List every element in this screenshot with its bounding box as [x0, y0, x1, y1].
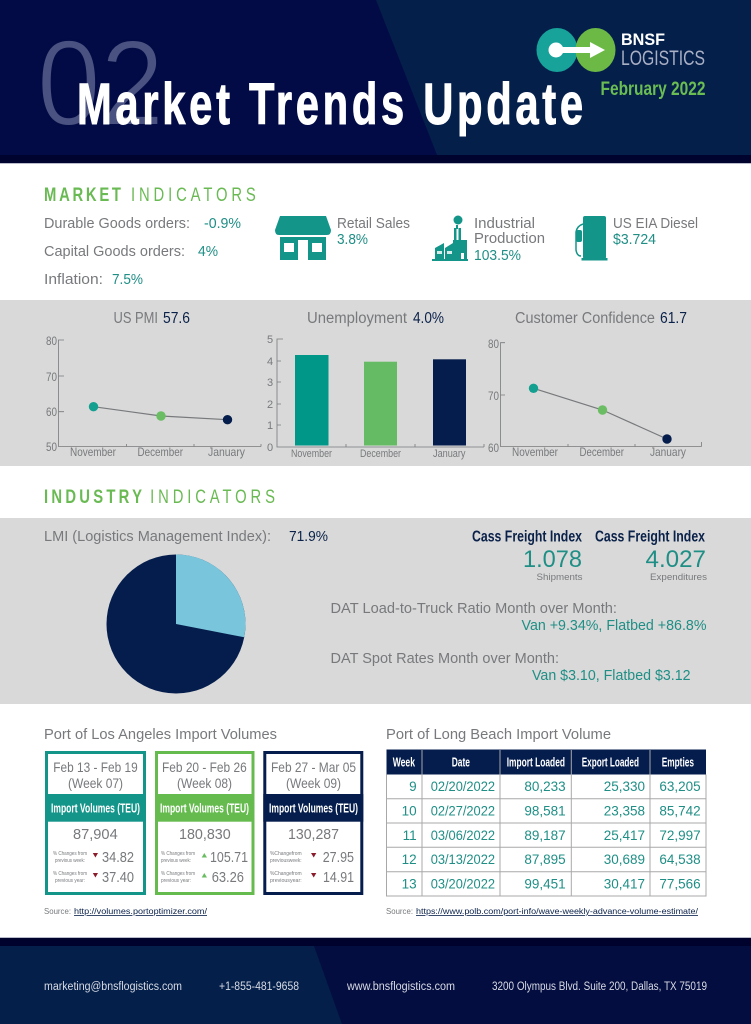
- industry indicators heading: INDUSTRY: [44, 486, 143, 507]
- table: Long Beach import volume: 13: [402, 877, 417, 892]
- card: week 09: previousweek:: [270, 858, 302, 864]
- retail sales: [337, 216, 410, 248]
- card: week 09: 130,287: [288, 826, 339, 843]
- market indicators list: 7.5%: [112, 271, 143, 288]
- footer banner: [0, 937, 751, 1024]
- retail sales: 3.8%: [337, 232, 368, 248]
- card: week 09: %Changefrom: [270, 851, 302, 857]
- card: week 08: Import Volumes (TEU): [160, 802, 249, 816]
- cass freight index: expenditures: Cass Freight Index: [595, 528, 705, 546]
- table: Long Beach import volume: 12: [402, 852, 417, 867]
- market indicators list: 4%: [198, 243, 218, 260]
- table: Long Beach import volume: 03/20/2022: [431, 877, 495, 892]
- line chart: US PMI: 70: [46, 370, 57, 384]
- DAT load to truck: Van +9.34%, Flatbed +86.8%: [522, 618, 707, 634]
- market indicators heading: INDICATORS: [131, 184, 256, 205]
- card: week 08: previous week:: [161, 858, 191, 864]
- line chart: US PMI: US PMI: [114, 310, 158, 327]
- card: week 07: [46, 752, 145, 894]
- bar chart: unemployment: December: [360, 448, 401, 460]
- cass freight index: expenditures: 4.027: [646, 546, 706, 573]
- card: week 08: (Week 08): [177, 775, 232, 791]
- title: Market Trends Update: [77, 71, 583, 137]
- market indicators heading: [44, 184, 256, 205]
- cass freight index: shipments: Cass Freight Index: [472, 528, 582, 546]
- line chart: US PMI: 50: [46, 440, 57, 454]
- line chart: US PMI: November: [70, 445, 116, 459]
- icon: fuel pump: [576, 216, 608, 260]
- table: Long Beach import volume: 99,451: [524, 877, 566, 892]
- card: week 07: 34.82: [102, 850, 134, 866]
- DAT spot rates: [330, 651, 690, 684]
- card: week 07: 37.40: [102, 870, 134, 886]
- table: Long Beach import volume: 23,358: [604, 804, 645, 818]
- table: Long Beach import volume: 02/27/2022: [431, 804, 495, 818]
- table: Long Beach import volume: [386, 750, 706, 896]
- source: Long Beach: https://www.polb.com/port-info/wave-weekly-advance-volume-estimate/: [416, 907, 699, 916]
- panel: industry indicators: [0, 518, 751, 704]
- card: week 09: 14.91: [323, 870, 354, 886]
- table: Long Beach import volume: 25,417: [604, 828, 645, 843]
- LMI label: LMI (Logistics Management Index):: [44, 529, 271, 545]
- logo: BNSF: [621, 30, 665, 49]
- industrial production: Industrial: [474, 216, 535, 232]
- table: Long Beach import volume: 77,566: [659, 877, 701, 892]
- bar chart: unemployment: 2: [267, 399, 273, 411]
- table: Long Beach import volume: Date: [452, 756, 470, 770]
- panel: economic charts: [0, 300, 751, 466]
- card: week 08: % Changes from: [161, 871, 195, 877]
- line chart: customer confidence: 80: [488, 337, 499, 351]
- LMI label: 71.9%: [289, 529, 328, 545]
- cass freight index: expenditures: [595, 528, 707, 583]
- bar chart: unemployment: 1: [267, 420, 273, 432]
- line chart: customer confidence: 70: [488, 389, 499, 403]
- bar chart: unemployment: 3: [267, 377, 273, 389]
- source: Los Angeles: Source:: [44, 907, 71, 916]
- table: Long Beach import volume: 98,581: [524, 804, 566, 818]
- card: week 07: 87,904: [73, 826, 118, 843]
- table: Long Beach import volume: 89,187: [524, 828, 566, 843]
- card: week 07: (Week 07): [68, 775, 123, 791]
- bar chart: unemployment: Unemployment: [307, 310, 408, 327]
- table: Long Beach import volume: 85,742: [659, 804, 701, 818]
- line chart: US PMI: January: [208, 445, 245, 459]
- bar chart: unemployment: 4.0%: [413, 310, 444, 327]
- issue number 02: 02: [37, 15, 164, 151]
- heading: Long Beach: Port of Long Beach Import Volume: [386, 727, 611, 743]
- card: week 07: Import Volumes (TEU): [51, 802, 140, 816]
- line chart: customer confidence: November: [512, 445, 558, 459]
- table: Long Beach import volume: 02/20/2022: [431, 779, 495, 794]
- line chart: customer confidence: December: [580, 445, 624, 459]
- footer contact details: www.bnsflogistics.com: [346, 981, 455, 993]
- logo: LOGISTICS: [621, 47, 705, 70]
- cass freight index: shipments: [472, 528, 583, 583]
- retail sales: Retail Sales: [337, 216, 410, 232]
- table: Long Beach import volume: 10: [402, 804, 417, 818]
- icon: factory: [432, 216, 468, 261]
- card: week 08: previous year:: [161, 878, 191, 884]
- bar chart: unemployment: 5: [267, 334, 273, 346]
- table: Long Beach import volume: Empties: [662, 756, 694, 770]
- table: Long Beach import volume: 72,997: [659, 828, 701, 843]
- market indicators heading: MARKET: [44, 184, 122, 205]
- card: week 08: 180,830: [179, 826, 231, 843]
- market indicators list: -0.9%: [204, 215, 241, 232]
- card: week 07: previous year:: [55, 878, 85, 884]
- bar chart: unemployment: January: [433, 448, 466, 460]
- card: week 07: Feb 13 - Feb 19: [53, 759, 138, 775]
- card: week 09: 27.95: [323, 850, 354, 866]
- diesel: US EIA Diesel: [613, 216, 698, 232]
- line chart: US PMI: [46, 310, 261, 459]
- card: week 09: [263, 752, 363, 894]
- cass freight index: shipments: Shipments: [536, 572, 583, 583]
- footer contact details: +1-855-481-9658: [219, 981, 299, 993]
- line chart: customer confidence: 61.7: [660, 310, 687, 327]
- table: Long Beach import volume: 87,895: [524, 852, 566, 867]
- header banner: [0, 0, 751, 164]
- line chart: US PMI: 60: [46, 405, 57, 419]
- date: February 2022: [600, 79, 706, 100]
- table: Long Beach import volume: Week: [393, 756, 415, 770]
- pie chart: LMI: [106, 554, 246, 694]
- card: week 07: % Changes from: [53, 851, 87, 857]
- card: week 07: previous week:: [55, 858, 85, 864]
- table: Long Beach import volume: 30,689: [604, 852, 645, 867]
- industry indicators heading: INDICATORS: [150, 486, 275, 507]
- line chart: customer confidence: Customer Confidence: [515, 310, 655, 327]
- table: Long Beach import volume: Import Loaded: [507, 756, 565, 770]
- card: week 07: % Changes from: [53, 871, 87, 877]
- card: week 09: Feb 27 - Mar 05: [271, 759, 356, 775]
- card: week 09: %Changefrom: [270, 871, 302, 877]
- footer contact details: [44, 981, 707, 993]
- logo: [536, 28, 705, 72]
- card: week 08: % Changes from: [161, 851, 195, 857]
- cass freight index: shipments: 1.078: [523, 546, 582, 573]
- industrial production: [474, 216, 545, 264]
- card: week 09: (Week 09): [286, 775, 341, 791]
- DAT spot rates: Van $3.10, Flatbed $3.12: [532, 668, 690, 684]
- table: Long Beach import volume: 80,233: [524, 779, 566, 794]
- industrial production: Production: [474, 231, 545, 247]
- bar chart: unemployment: November: [291, 448, 332, 460]
- line chart: customer confidence: [488, 310, 702, 459]
- market indicators list: Durable Goods orders:: [44, 215, 190, 232]
- industrial production: 103.5%: [474, 248, 521, 264]
- heading: Los Angeles: Port of Los Angeles Import Volumes: [44, 727, 277, 743]
- DAT spot rates: DAT Spot Rates Month over Month:: [330, 651, 559, 667]
- table: Long Beach import volume: 03/06/2022: [431, 828, 495, 843]
- footer contact details: 3200 Olympus Blvd. Suite 200, Dallas, TX 75019: [492, 981, 707, 993]
- DAT load to truck: DAT Load-to-Truck Ratio Month over Month:: [330, 601, 617, 617]
- line chart: US PMI: December: [138, 445, 183, 459]
- bar chart: unemployment: [267, 310, 484, 460]
- source: Long Beach: Source:: [386, 907, 413, 916]
- line chart: customer confidence: 60: [488, 441, 499, 455]
- table: Long Beach import volume: Export Loaded: [582, 756, 639, 770]
- industry indicators heading: [44, 486, 275, 507]
- source: Los Angeles: http://volumes.portoptimizer.com/: [74, 907, 208, 916]
- diesel: $3.724: [613, 232, 656, 248]
- bar chart: unemployment: 0: [267, 442, 273, 454]
- table: Long Beach import volume: 30,417: [604, 877, 645, 892]
- card: week 08: [155, 752, 254, 894]
- card: week 09: Import Volumes (TEU): [269, 802, 358, 816]
- market indicators list: Capital Goods orders:: [44, 243, 185, 260]
- footer contact details: marketing@bnsflogistics.com: [44, 981, 182, 993]
- market indicators list: Inflation:: [44, 271, 103, 288]
- card: week 08: Feb 20 - Feb 26: [162, 759, 247, 775]
- table: Long Beach import volume: 11: [403, 828, 417, 843]
- market indicators list: [44, 215, 241, 288]
- table: Long Beach import volume: 9: [409, 779, 417, 794]
- bar chart: unemployment: 4: [267, 356, 273, 368]
- card: week 08: 105.71: [210, 850, 248, 866]
- card: week 09: previousyear:: [270, 878, 302, 884]
- table: Long Beach import volume: 03/13/2022: [431, 852, 495, 867]
- table: Long Beach import volume: 25,330: [604, 779, 645, 794]
- DAT load to truck: [330, 601, 707, 634]
- card: week 08: 63.26: [212, 870, 244, 886]
- diesel: [613, 216, 698, 248]
- line chart: customer confidence: January: [650, 445, 686, 459]
- table: Long Beach import volume: 64,538: [659, 852, 701, 867]
- table: Long Beach import volume: 63,205: [659, 779, 701, 794]
- icon: store: [275, 216, 331, 260]
- line chart: US PMI: 57.6: [163, 310, 190, 327]
- line chart: US PMI: 80: [46, 334, 57, 348]
- cass freight index: expenditures: Expenditures: [650, 572, 707, 583]
